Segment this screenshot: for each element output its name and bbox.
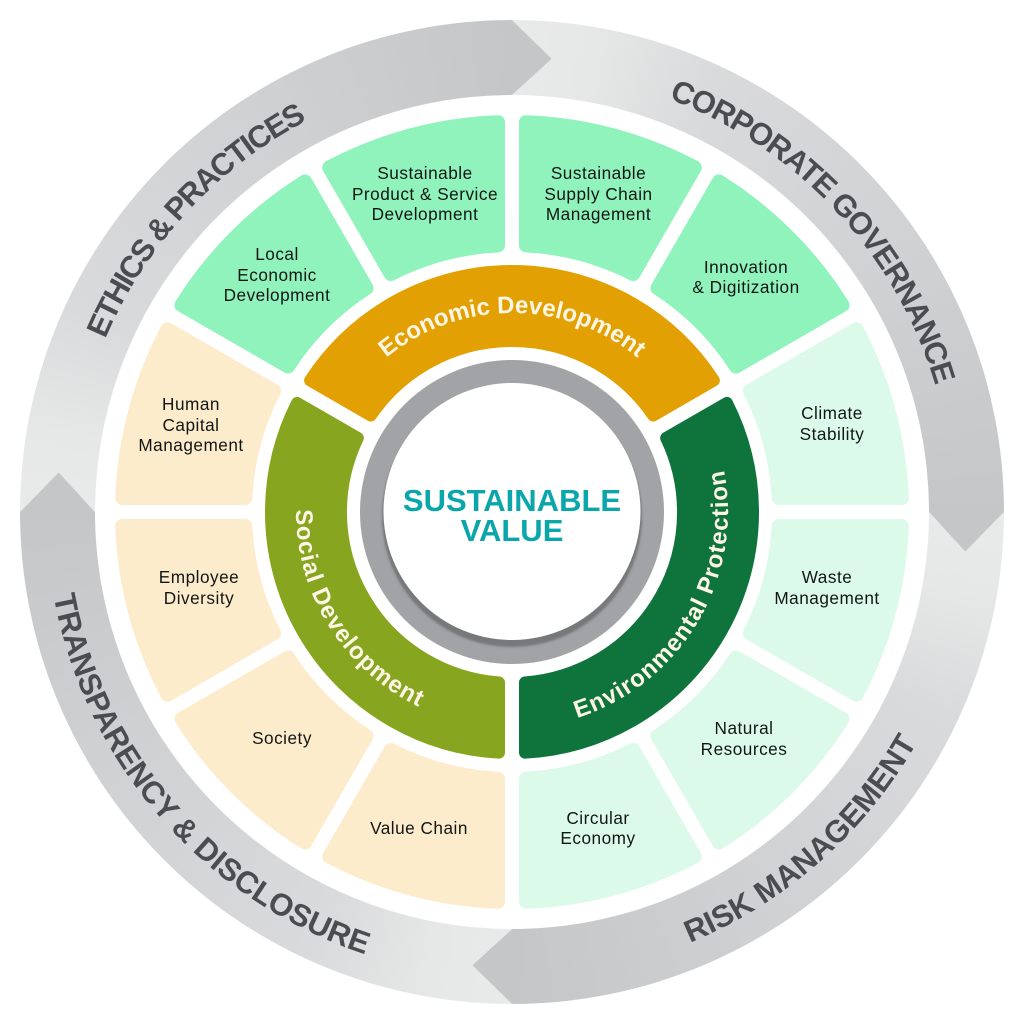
tile text: value chain: Value Chain	[370, 818, 468, 838]
tile text: climate stability: Stability	[800, 424, 864, 444]
tile shape: employee diversity	[113, 495, 282, 697]
tile text: employee diversity: Diversity	[164, 588, 234, 608]
arrow label: transparency and disclosure: TRANSPARENCY & DISCLOSURE	[55, 592, 371, 954]
tile shape: waste management	[742, 495, 911, 697]
tile text: circular economy: Economy	[560, 828, 636, 848]
arrow: corporate governance band	[512, 20, 1004, 552]
tile text: sustainable product: Product & Service	[352, 184, 498, 204]
center hub	[360, 360, 664, 664]
tile text: climate stability: Climate	[801, 403, 863, 423]
tile text: sustainable supply chain: Management	[546, 204, 651, 224]
arrow: transparency and disclosure band	[20, 472, 512, 1004]
tile text: human capital: Management	[138, 435, 244, 455]
tile shape: sustainable product and service development	[327, 113, 529, 282]
panel: environmental tiles	[495, 327, 911, 911]
center title: SUSTAINABLE	[403, 483, 621, 518]
band: economic development	[304, 265, 720, 422]
band label: social development: Social Development	[296, 510, 424, 706]
tile shape: society	[174, 635, 389, 850]
tile text: innovation: & Digitization	[692, 277, 800, 297]
tile text: employee diversity: Employee	[159, 567, 239, 587]
tile text: human capital: Human	[162, 394, 220, 414]
tile shape: natural resources	[635, 635, 850, 850]
tile text: sustainable product: Development	[372, 204, 478, 224]
tile text: waste management: Management	[774, 588, 880, 608]
ring inner shadow	[382, 387, 642, 647]
tile text: local economic development: Economic	[237, 265, 317, 285]
tile shape: climate stability	[742, 327, 911, 529]
tile text: sustainable supply chain: Supply Chain	[544, 184, 653, 204]
arrow label: risk management: RISK MANAGEMENT	[683, 732, 914, 942]
tile text: natural resources: Natural	[715, 718, 773, 738]
arrow: risk management band	[472, 512, 1004, 1004]
tile shape: innovation and digitization	[635, 174, 850, 389]
band label: environmental protection: Environmental Protection	[573, 472, 728, 718]
white disc	[384, 383, 640, 640]
tile text: sustainable product: Sustainable	[377, 163, 473, 183]
band: social development	[202, 385, 529, 807]
tile shape: local economic development	[174, 174, 389, 389]
tile text: circular economy: Circular	[566, 808, 630, 828]
tile shape: human capital management	[113, 327, 282, 529]
tile text: human capital: Capital	[162, 415, 220, 435]
tile text: local economic development: Local	[255, 244, 299, 264]
tile shape: sustainable supply chain management	[495, 113, 697, 282]
center title: VALUE	[461, 513, 563, 548]
panel: social tiles	[113, 327, 529, 911]
arrow label: ethics and practices: ETHICS & PRACTICES	[86, 104, 304, 338]
tile shape: circular economy	[495, 742, 697, 911]
tile text: local economic development: Development	[224, 285, 330, 305]
tile text: natural resources: Resources	[701, 739, 787, 759]
band: environmental protection	[495, 385, 822, 807]
tile text: sustainable supply chain: Sustainable	[551, 163, 646, 183]
arrow: ethics and practices band	[20, 20, 552, 512]
band label: economic development: Economic Development	[378, 296, 646, 358]
tile shape: value chain	[327, 742, 529, 911]
gray ring	[360, 360, 664, 664]
panel: economic tiles	[174, 113, 850, 389]
arrow label: corporate governance: CORPORATE GOVERNANCE	[672, 82, 956, 384]
tile text: waste management: Waste	[802, 567, 852, 587]
tile text: society: Society	[252, 728, 312, 748]
tile text: innovation: Innovation	[704, 257, 788, 277]
